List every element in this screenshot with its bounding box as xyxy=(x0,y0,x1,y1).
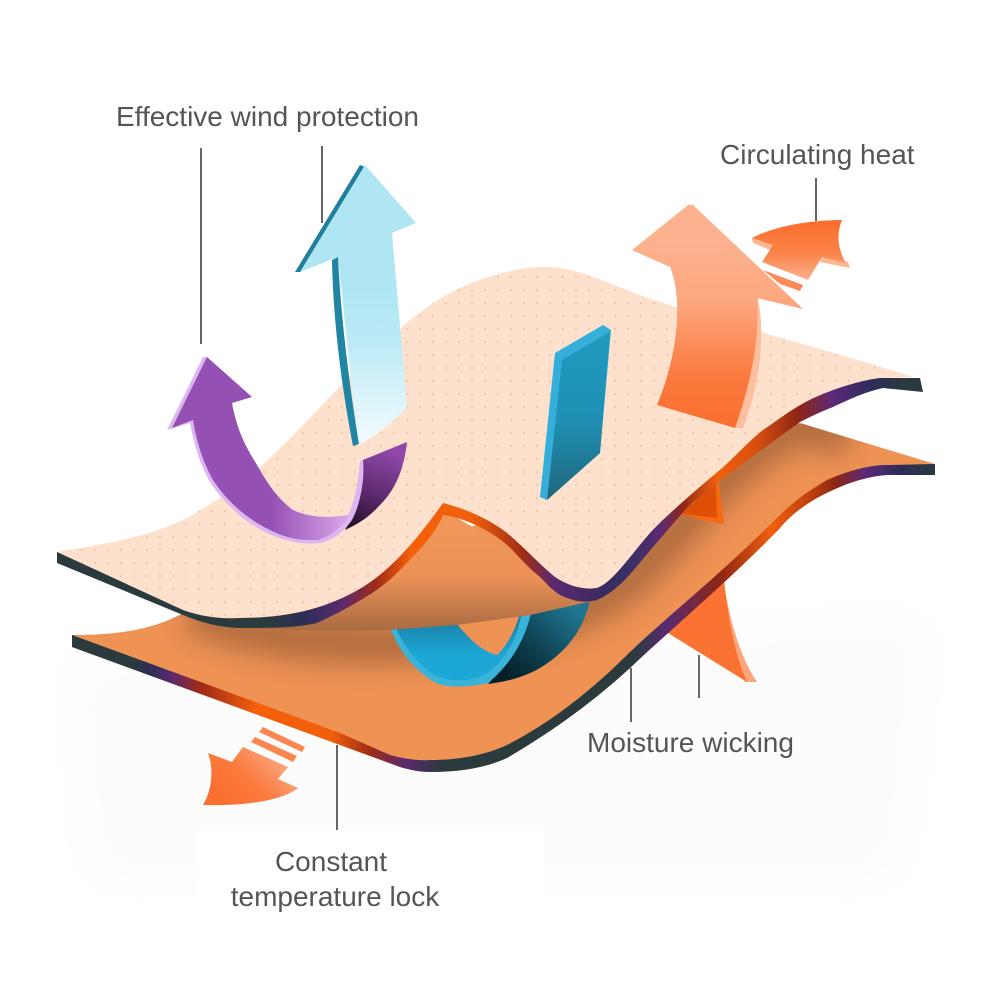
label: constant temperature lock: temperature lock xyxy=(231,881,440,912)
arrow: orange moisture arrow below fabric xyxy=(668,570,757,682)
leader line: moisture wicking left xyxy=(630,668,632,722)
label: circulating heat: Circulating heat xyxy=(720,139,915,170)
arrow: purple curved arrow xyxy=(167,357,407,544)
arrow: small orange circulating heat arrow xyxy=(752,220,850,291)
leader line: circulating heat xyxy=(815,178,817,221)
label: constant temperature lock: Constant xyxy=(275,846,387,877)
leader line: moisture wicking right xyxy=(698,655,700,698)
panel: lower orange fabric layer xyxy=(72,423,935,772)
panel: upper peach fabric layer xyxy=(57,267,923,628)
arrow: large orange circulating heat arrow xyxy=(632,205,803,428)
icon: orange wedge between layers xyxy=(682,478,724,524)
arrow: orange heat arrow pointing down-left xyxy=(203,727,305,805)
panel: underside of upper layer xyxy=(240,510,597,631)
icon: blue curved moisture channel xyxy=(390,600,590,687)
label: effective wind protection: Effective wind protection xyxy=(116,101,419,132)
icon: teal vertical panel on fabric xyxy=(540,325,611,500)
leader line: wind protection left xyxy=(200,148,202,344)
leader line: wind protection right xyxy=(321,146,323,223)
label: moisture wicking: Moisture wicking xyxy=(587,727,794,758)
leader line: constant temperature lock xyxy=(336,745,338,830)
arrow: light blue wind arrow xyxy=(295,165,416,446)
